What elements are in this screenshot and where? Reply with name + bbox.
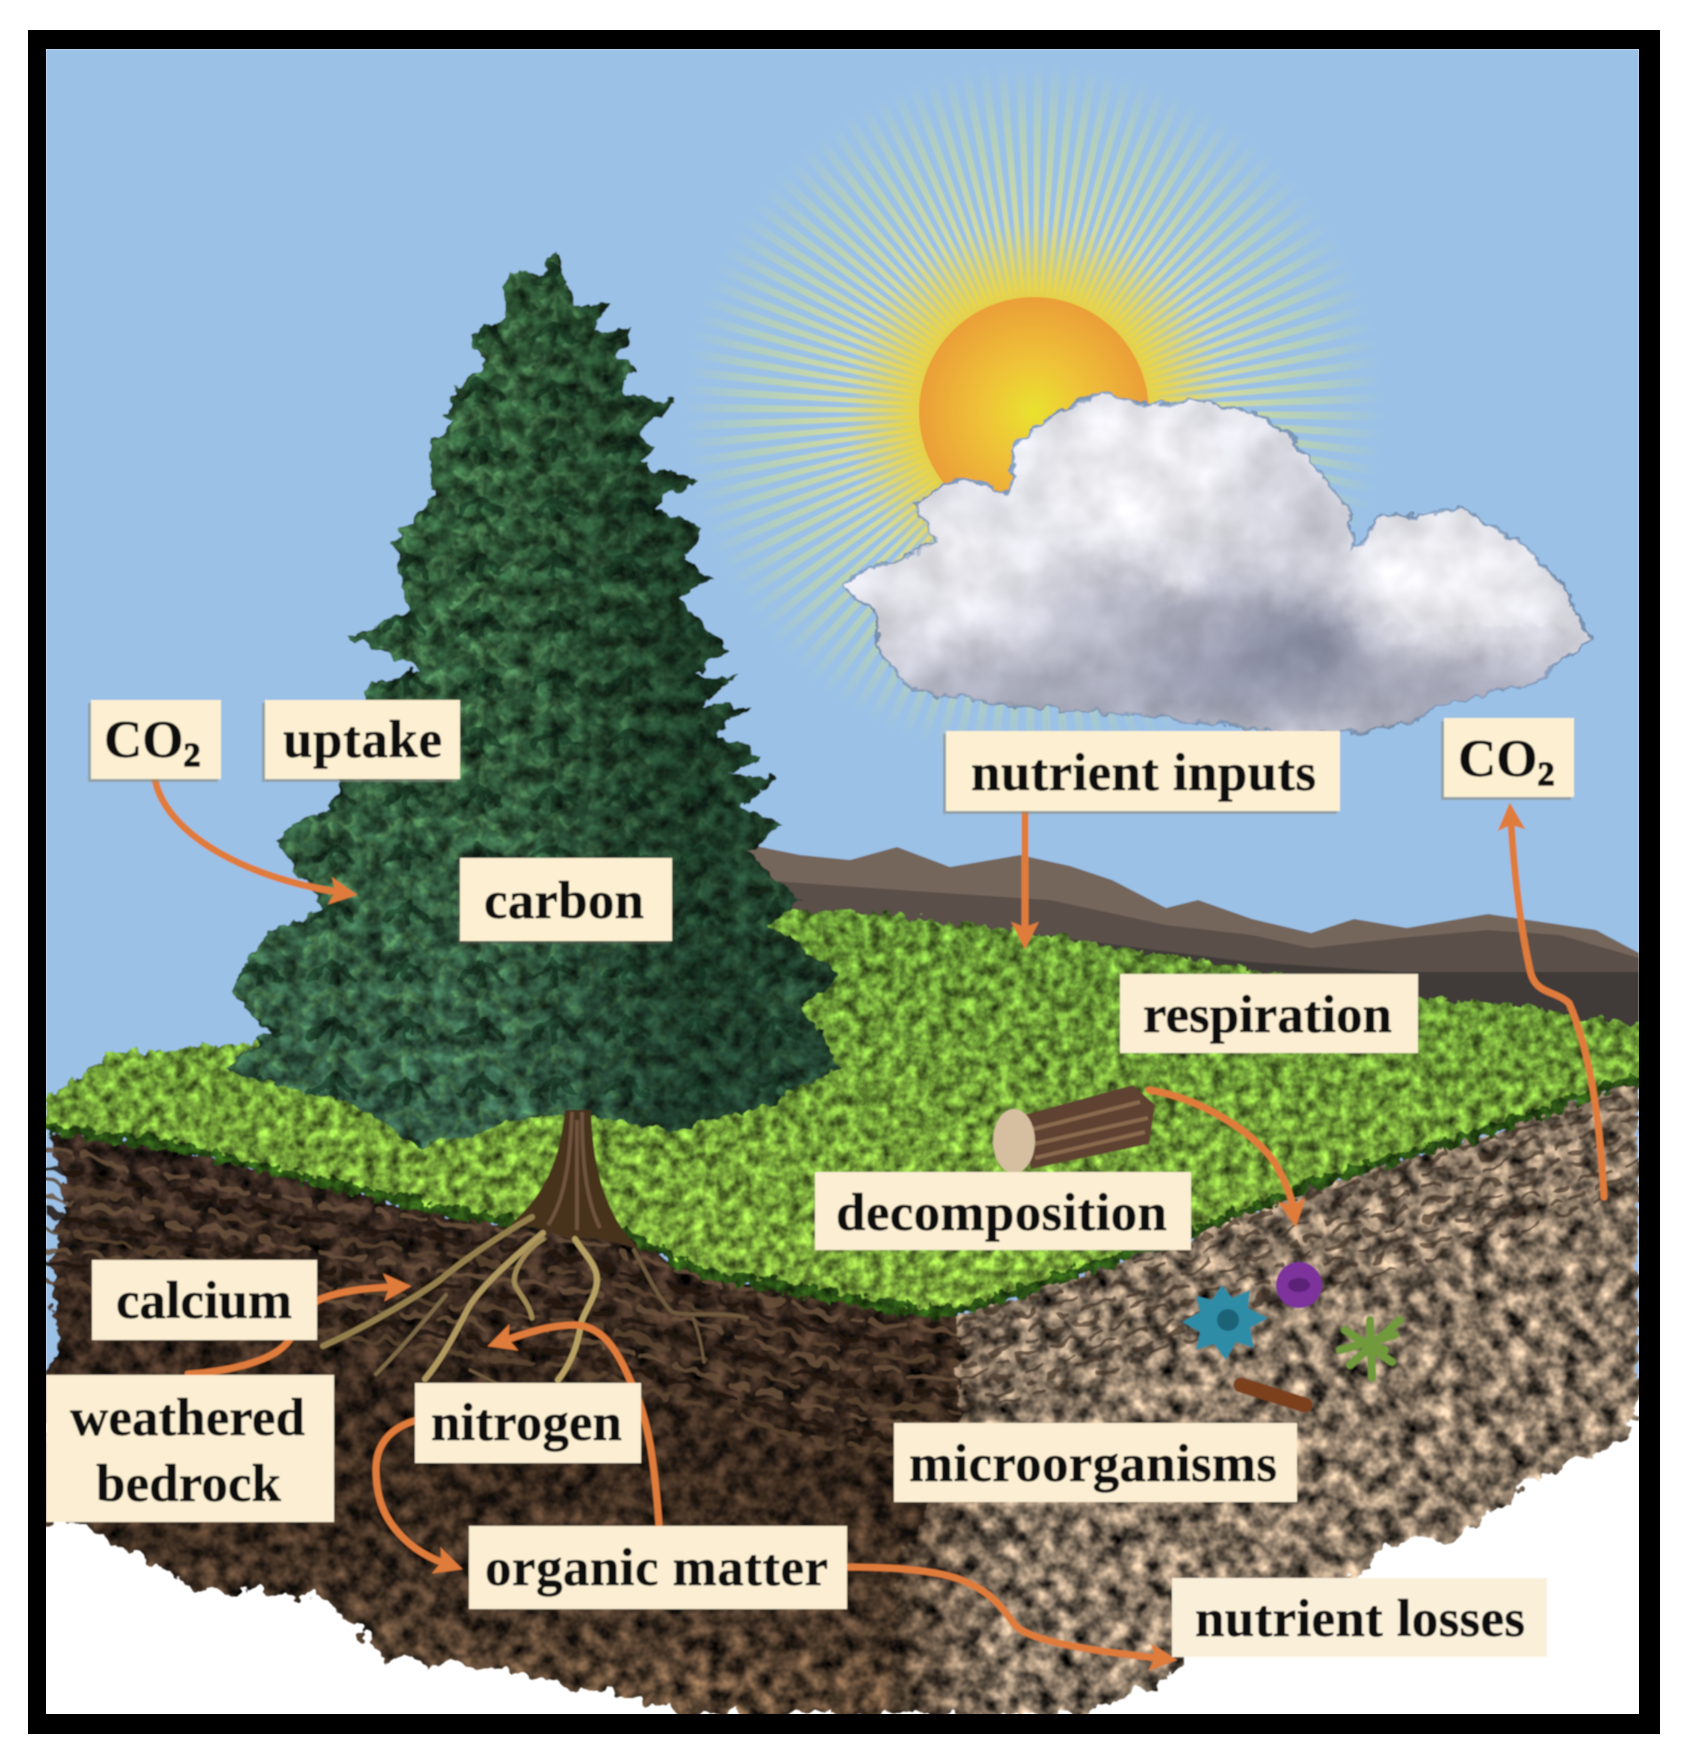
- log: [993, 1085, 1155, 1173]
- label: CO2 left: 2: [184, 737, 200, 774]
- cloud: [843, 393, 1590, 745]
- soil: dark face strata lines: [46, 1150, 961, 1460]
- label: calcium: [92, 1260, 317, 1340]
- label: CO2 right: 2: [1538, 756, 1554, 793]
- label: uptake: uptake: [283, 711, 442, 769]
- arrow: weathered bedrock calcium to roots: [188, 1287, 392, 1374]
- arrow: nutrient inputs to ground: [1022, 811, 1028, 930]
- arrow: log decomposition to soil: [1149, 1090, 1293, 1208]
- sky: [46, 49, 1639, 1399]
- arrow: nitrogen to organic matter: [376, 1421, 444, 1563]
- label: respiration: [1120, 974, 1418, 1053]
- icon: sun with rays: [799, 177, 1269, 647]
- label: carbon: carbon: [484, 872, 644, 930]
- label: uptake: [262, 700, 460, 782]
- label: carbon: [458, 858, 672, 944]
- icon: brown rod microorganism: [1241, 1385, 1305, 1405]
- soil: light face strata lines: [961, 1086, 1645, 1406]
- label: CO2 right: [1441, 718, 1574, 800]
- arrows: [155, 780, 1604, 1658]
- icon: teal microorganism: [1182, 1285, 1268, 1360]
- arrow: organic matter nitrogen to roots: [506, 1325, 659, 1525]
- label: nutrient inputs: nutrient inputs: [971, 744, 1316, 802]
- label: organic matter: organic matter: [485, 1539, 828, 1597]
- label: nitrogen: [415, 1383, 641, 1463]
- label: calcium: calcium: [116, 1272, 292, 1330]
- soil: light right face: [890, 1076, 1639, 1714]
- label: CO2 right: CO: [1458, 730, 1538, 788]
- soil: dark left face: [40, 1130, 980, 1714]
- label: CO2 left: [88, 700, 221, 782]
- tree trunk: [510, 1110, 640, 1250]
- arrow: respiration to CO2: [1511, 822, 1604, 1197]
- label: nutrient losses: [1172, 1578, 1547, 1657]
- grass surface: [46, 909, 1645, 1317]
- arrow: CO2 to tree: [155, 780, 338, 892]
- label: weathered bedrock: bedrock: [96, 1455, 282, 1513]
- label: nitrogen: nitrogen: [431, 1394, 622, 1452]
- label: respiration: respiration: [1143, 986, 1392, 1044]
- icon: green microorganism: [1340, 1320, 1400, 1378]
- label: nutrient inputs: [943, 731, 1340, 814]
- mountains: [746, 846, 1639, 1028]
- label: decomposition: [815, 1172, 1191, 1250]
- label: organic matter: [469, 1526, 847, 1609]
- label: weathered bedrock: weathered: [70, 1389, 305, 1447]
- tree roots: [323, 1217, 747, 1385]
- icon: purple microorganism: [1276, 1262, 1322, 1308]
- label: decomposition: decomposition: [836, 1184, 1167, 1242]
- tree foliage: [226, 252, 843, 1149]
- label: weathered bedrock: [46, 1375, 334, 1522]
- label: microorganisms: [894, 1423, 1297, 1502]
- label: CO2 left: CO: [104, 711, 184, 769]
- label: nutrient losses: nutrient losses: [1195, 1590, 1525, 1648]
- arrow: organic matter to nutrient losses: [847, 1567, 1158, 1658]
- label: microorganisms: microorganisms: [909, 1435, 1277, 1493]
